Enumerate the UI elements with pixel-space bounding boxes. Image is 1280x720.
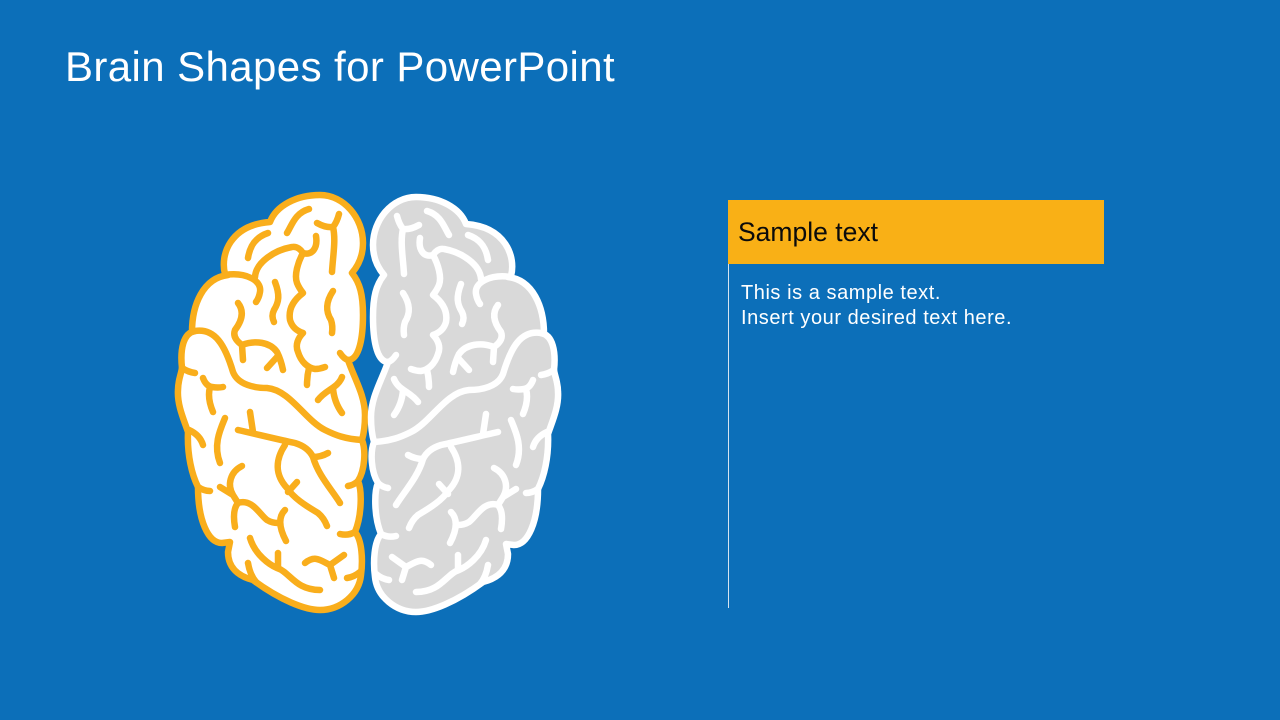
title: Brain Shapes for PowerPoint — [65, 43, 615, 90]
panel body text: Insert your desired text here. — [741, 307, 1012, 329]
panel header: sample text: Sample text — [738, 217, 878, 247]
panel body text: This is a sample text. — [741, 282, 941, 304]
left hemisphere (orange outline, white fill) — [178, 195, 365, 610]
right hemisphere (white outline, grey fill) — [371, 197, 558, 612]
panel body text — [741, 282, 1012, 329]
panel divider line — [728, 264, 729, 608]
panel header: sample text — [728, 200, 1104, 264]
